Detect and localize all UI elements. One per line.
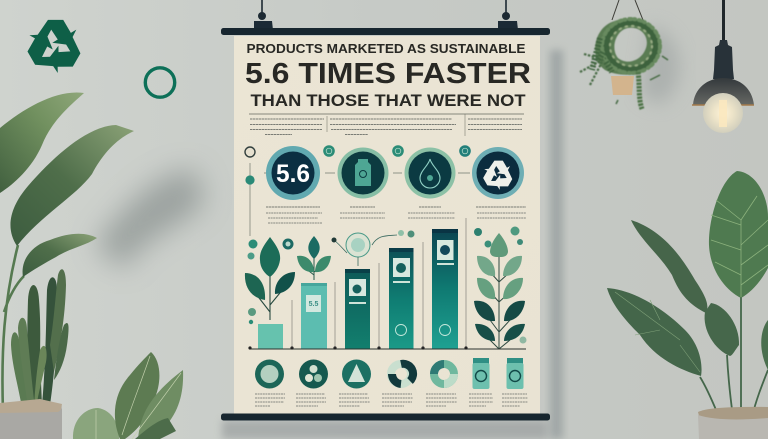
right plant: [607, 171, 768, 417]
bottom captions: [255, 394, 528, 406]
bar 3: [345, 269, 370, 349]
bottom rod: [221, 414, 550, 420]
plant right: [474, 226, 526, 349]
icon: ring segments dark: [391, 364, 413, 384]
icon: recycling symbol on wall: [21, 20, 86, 78]
bar 2: 5.5: [309, 301, 318, 308]
icon: ring segments teal: [434, 364, 454, 384]
bar 2: [301, 283, 327, 349]
chart: rising bars with plants: [245, 226, 527, 350]
bar 4: [389, 248, 414, 349]
divider and intro text columns: [249, 114, 524, 136]
circle captions: [266, 207, 526, 349]
panel: poster: [221, 0, 550, 420]
circle: water drop: [404, 148, 456, 198]
small timeline badges: [245, 145, 471, 185]
icon: triangle circle: [342, 360, 371, 388]
circle: 5.6: [266, 146, 320, 200]
hanging clips and top rod: [221, 0, 550, 35]
bar 1: [258, 324, 283, 349]
icon: jar 2: [506, 358, 524, 389]
icon: jar 1: [472, 358, 490, 389]
pendant lamp: [692, 0, 754, 133]
axis: [248, 242, 526, 350]
circle: recycling: [472, 147, 524, 199]
wall shadows: [95, 25, 680, 439]
poster paper: [234, 36, 540, 414]
icon: trio circle: [299, 360, 328, 388]
timeline connectors: [250, 163, 470, 236]
title: THAN THOSE THAT WERE NOT: [250, 91, 526, 110]
left pot: [0, 399, 62, 439]
target icon above bar 3: [332, 230, 414, 266]
title: PRODUCTS MARKETED AS SUSTAINABLE: [246, 41, 526, 56]
right pot: [698, 407, 768, 439]
circle: product tube: [338, 148, 388, 198]
left tall plant: [0, 92, 134, 412]
title: [245, 41, 531, 110]
bottom left plant: [73, 352, 183, 439]
plant left: [245, 237, 295, 324]
icon: leaf circle: [255, 360, 284, 388]
left cactus: [11, 269, 69, 408]
icon: green ring on wall: [145, 68, 175, 97]
circle: 5.6: 5.6: [276, 160, 310, 188]
bar 5: [432, 229, 458, 349]
plant on bar 2: [297, 236, 331, 280]
title: 5.6 TIMES FASTER: [245, 58, 531, 90]
bottom icon row: [255, 358, 524, 389]
hanging wreath planter: [580, 0, 668, 109]
